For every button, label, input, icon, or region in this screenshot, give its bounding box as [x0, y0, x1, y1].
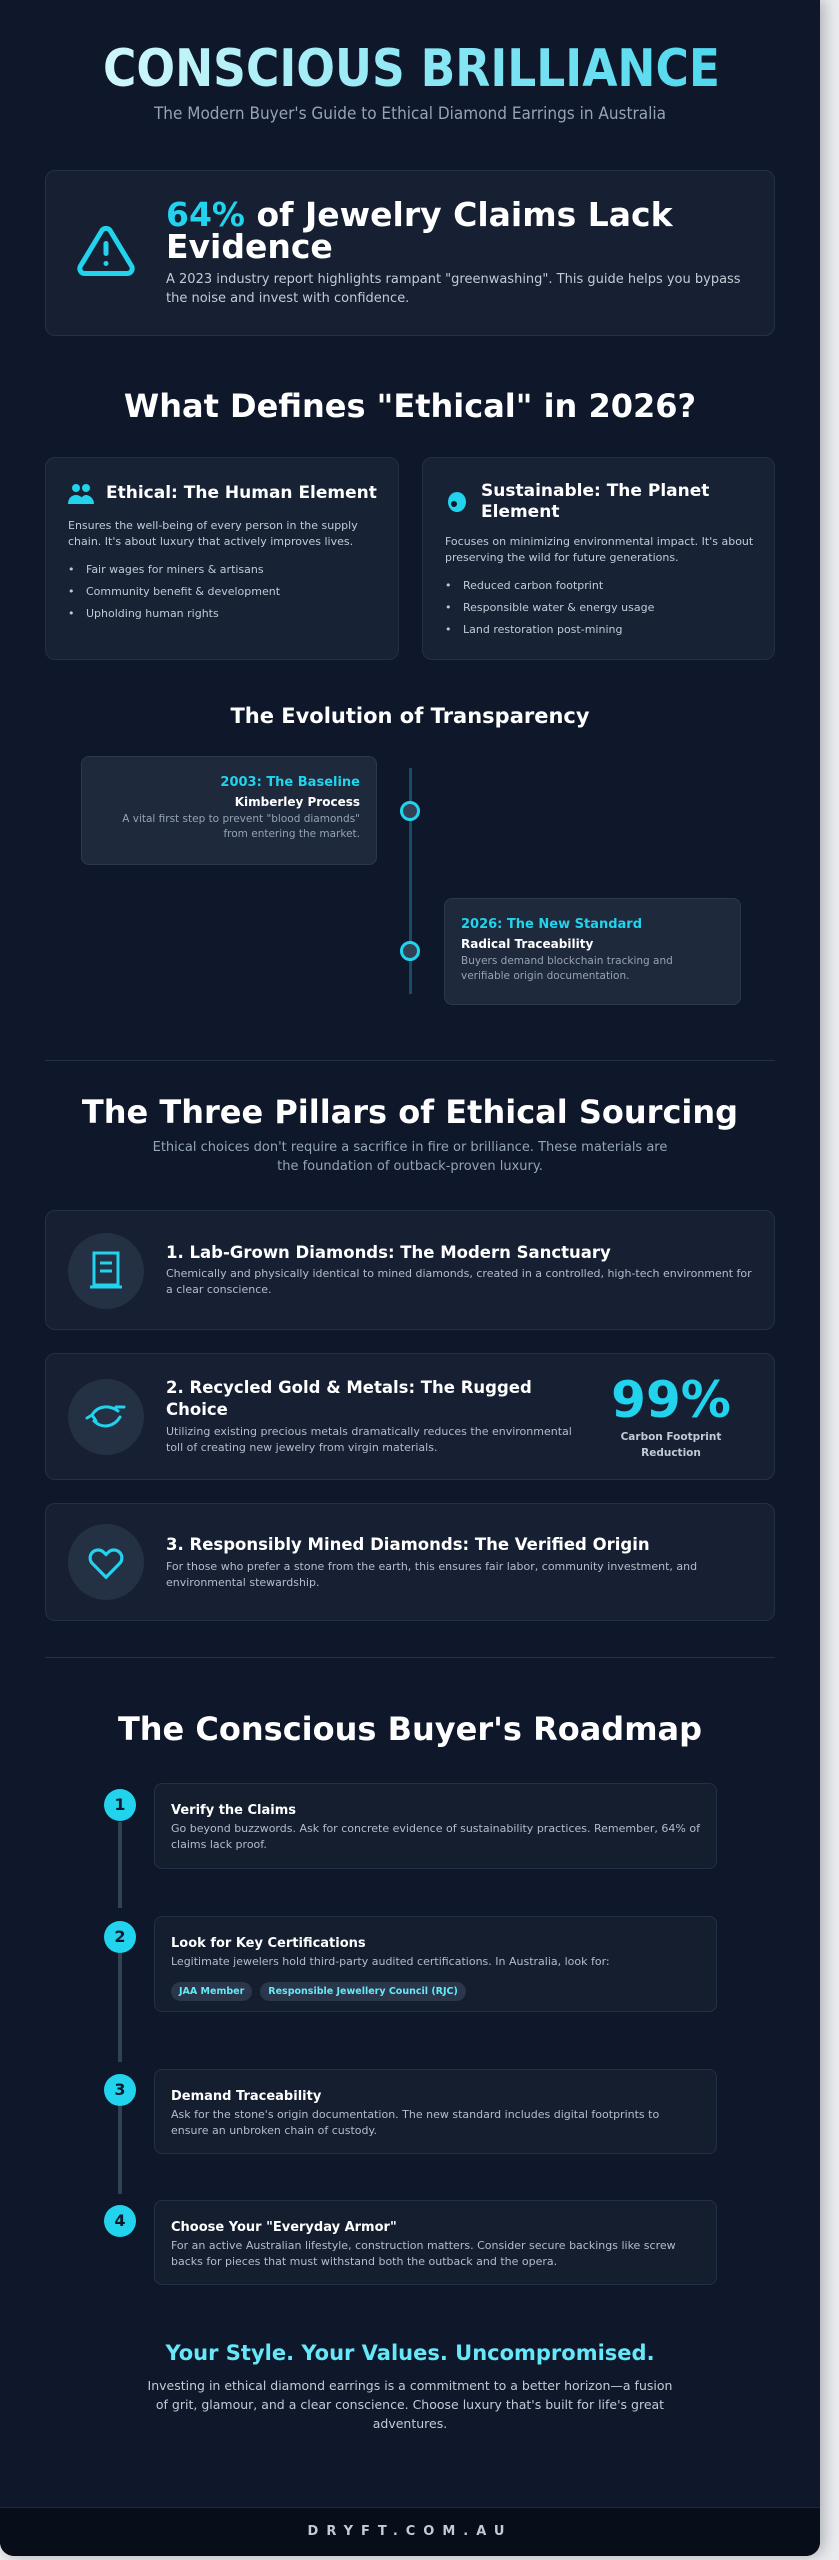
timeline item 2003: Kimberley Process: [235, 795, 360, 809]
pillar 1: 1. Lab-Grown Diamonds: The Modern Sanctuary: [166, 1243, 611, 1262]
roadmap: Verify the Claims: [171, 1803, 296, 1818]
icon: lab: [68, 1233, 144, 1309]
roadmap: [104, 1783, 717, 2285]
pillar 3: 3. Responsibly Mined Diamonds: The Verified Origin: [166, 1535, 650, 1554]
pillar 3: For those who prefer a stone from the earth, this ensures fair labor, community investment, and environmental stewardship.: [166, 1560, 697, 1589]
alert text: A 2023 industry report highlights rampant "greenwashing". This guide helps you bypass the noise and invest with confidence.: [166, 272, 741, 306]
panel: ethical: Ensures the well-being of every person in the supply chain. It's about luxury that actively improves lives.: [68, 519, 358, 548]
icon: planet: [448, 492, 466, 512]
title: CONSCIOUS BRILLIANCE: [103, 39, 720, 99]
timeline item 2003: 2003: The Baseline: [220, 775, 360, 790]
step 1: [104, 1789, 136, 1821]
roadmap: Ask for the stone's origin documentation. The new standard includes digital footprints to ensure an unbroken chain of custody.: [171, 2108, 659, 2137]
step 4: [104, 2205, 136, 2237]
pillar 1: Chemically and physically identical to mined diamonds, created in a controlled, high-tech environment for a clear conscience.: [166, 1267, 752, 1296]
pillar 2: [45, 1353, 775, 1480]
heading: what defines: What Defines "Ethical" in 2026?: [124, 387, 696, 425]
alert heading: 64% of Jewelry Claims Lack Evidence: [166, 195, 673, 266]
panel: sustainable: Sustainable: The Planet Element: [481, 481, 709, 522]
step 3: 3: [114, 2080, 126, 2099]
pillar 3: [45, 1503, 775, 1621]
panel: sustainable: Reduced carbon footprint: [463, 579, 603, 592]
panel: ethical: Upholding human rights: [86, 607, 219, 620]
roadmap: Go beyond buzzwords. Ask for concrete evidence of sustainability practices. Remember, 64% of claims lack proof.: [171, 1822, 700, 1851]
closing heading: Your Style. Your Values. Uncompromised.: [165, 2341, 655, 2365]
pillar 2: Utilizing existing precious metals dramatically reduces the environmental toll of creating new jewelry from virgin materials.: [166, 1425, 572, 1454]
roadmap: For an active Australian lifestyle, construction matters. Consider secure backings like screw backs for pieces that must withstand both the outback and the opera.: [171, 2239, 676, 2268]
subtitle: The Modern Buyer's Guide to Ethical Diamond Earrings in Australia: [154, 104, 666, 124]
timeline item 2026: [444, 898, 741, 1005]
panel: ethical: Community benefit & development: [86, 585, 280, 598]
panel: sustainable: [422, 457, 775, 660]
stat 99%: Carbon Footprint Reduction: [621, 1431, 721, 1459]
stat 99%: [611, 1371, 731, 1459]
icon: warning: [77, 226, 135, 276]
step 2: 2: [114, 1927, 126, 1946]
timeline item 2026: 2026: The New Standard: [461, 917, 642, 932]
panel: ethical: Fair wages for miners & artisans: [86, 563, 264, 576]
panel: ethical: Ethical: The Human Element: [106, 483, 377, 503]
roadmap: Legitimate jewelers hold third-party audited certifications. In Australia, look for:: [171, 1955, 610, 1968]
step 1: 1: [114, 1795, 126, 1814]
roadmap: Look for Key Certifications: [171, 1936, 366, 1951]
timeline item 2003: [81, 756, 377, 865]
alert card: [45, 170, 775, 336]
step 4: 4: [114, 2211, 126, 2230]
timeline item 2026: Radical Traceability: [461, 937, 593, 951]
pillars subtitle: Ethical choices don't require a sacrifice in fire or brilliance. These materials are the foundation of outback-proven luxury.: [153, 1140, 667, 1174]
heading: three pillars: The Three Pillars of Ethical Sourcing: [82, 1093, 738, 1131]
panel: ethical: [45, 457, 399, 660]
timeline: [81, 756, 741, 1005]
stat 99%: 99%: [611, 1371, 731, 1429]
timeline item 2003: A vital first step to prevent "blood diamonds" from entering the market.: [122, 813, 360, 840]
step 3: [104, 2074, 136, 2106]
panel: sustainable: Land restoration post-mining: [463, 623, 622, 636]
roadmap: JAA Member: [179, 1986, 244, 1997]
footer: [0, 2507, 820, 2556]
roadmap: Choose Your "Everyday Armor": [171, 2220, 397, 2235]
heading: roadmap: The Conscious Buyer's Roadmap: [118, 1710, 702, 1748]
roadmap: Responsible Jewellery Council (RJC): [268, 1986, 458, 1997]
timeline item 2026: Buyers demand blockchain tracking and verifiable origin documentation.: [461, 955, 673, 982]
panel: sustainable: Responsible water & energy usage: [463, 601, 654, 614]
icon: heart: [68, 1524, 144, 1600]
step 2: [104, 1921, 136, 1953]
pillar 2: 2. Recycled Gold & Metals: The Rugged Choice: [166, 1378, 532, 1419]
pillar 1: [45, 1210, 775, 1330]
panel: sustainable: Focuses on minimizing environmental impact. It's about preserving the wild for future generations.: [445, 535, 753, 564]
icon: recycle: [68, 1379, 144, 1455]
closing text: Investing in ethical diamond earrings is a commitment to a better horizon—a fusion of grit, glamour, and a clear conscience. Choose luxury that's built for life's great adventures.: [148, 2378, 672, 2431]
icon: people: [68, 484, 94, 504]
heading: evolution: The Evolution of Transparency: [230, 704, 590, 728]
roadmap: Demand Traceability: [171, 2089, 321, 2104]
footer: DRYFT.COM.AU: [308, 2524, 512, 2539]
